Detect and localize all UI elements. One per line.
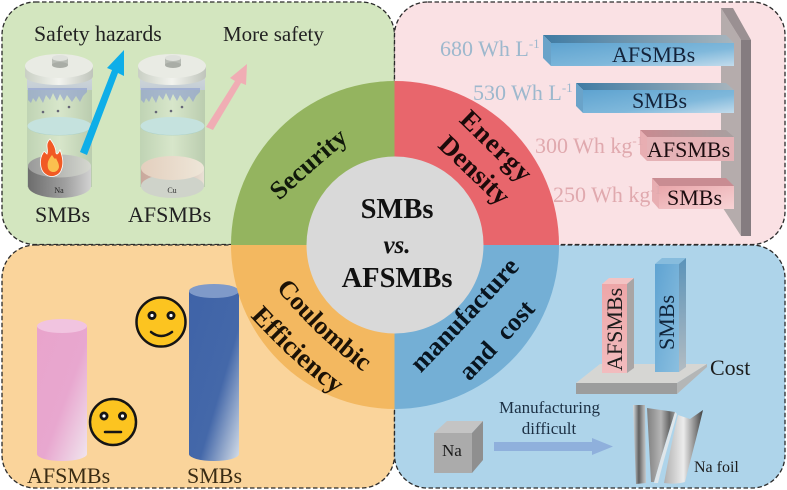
value: 680 Wh per litre: 680 Wh L	[440, 36, 529, 61]
bar label: SMBs gravimetric: SMBs	[667, 185, 722, 210]
pillar label: AFSMBs: AFSMBs	[602, 288, 627, 371]
ring label: energy: Energy	[458, 108, 530, 182]
label: SMBs battery: SMBs	[35, 202, 90, 227]
ring label: density: Density	[437, 134, 508, 204]
chart: energy density wall and bars	[543, 8, 751, 236]
chart: blue SMBs cylinder	[189, 284, 239, 461]
label: Na foil: Na foil	[694, 459, 739, 476]
chart: pink AFSMBs cylinder	[37, 319, 87, 461]
icon: smiling face	[136, 298, 186, 346]
chart: cost pillars on base	[576, 258, 707, 394]
bar label: AFSMBs gravimetric: AFSMBs	[647, 137, 730, 162]
label: AFSMBs cylinder: AFSMBs	[27, 463, 110, 488]
icon: SMB battery with sodium anode and flame	[25, 54, 93, 198]
center title: vs.	[383, 232, 411, 259]
label: SMBs cylinder: SMBs	[187, 463, 242, 488]
center title: AFSMBs	[342, 263, 452, 294]
heading: safety hazards: Safety hazards	[34, 22, 162, 46]
bar label: AFSMBs volumetric: AFSMBs	[612, 42, 695, 67]
icon: SMB battery with sodium anode and flame: Na	[54, 186, 64, 195]
value: 300 Wh per kg: -1	[632, 133, 643, 148]
arrow: more safety	[206, 64, 247, 130]
value: 530 Wh per litre: -1	[562, 80, 573, 95]
icon: sodium cube	[434, 421, 483, 473]
ring label: and cost: and cost	[462, 302, 536, 380]
pillar label: SMBs: SMBs	[654, 295, 679, 350]
ring label: efficiency: Efficiency	[250, 304, 342, 394]
value: 680 Wh per litre: -1	[529, 36, 540, 51]
panel: security background	[2, 2, 394, 244]
ring label: coulombic: Coulombic	[280, 281, 370, 371]
arrow: safety hazards	[80, 50, 124, 155]
value: 530 Wh per litre: 530 Wh L	[473, 80, 562, 105]
value: 300 Wh per kg: 300 Wh kg	[535, 133, 632, 158]
panel: coulombic efficiency background	[2, 245, 394, 488]
arrow: manufacturing	[494, 438, 613, 455]
panel: energy density background	[394, 2, 785, 244]
label: manufacturing difficult: difficult	[522, 419, 577, 438]
icon: AFSMB battery with copper collector: Cu	[167, 186, 177, 195]
ring label: security: Security	[270, 131, 346, 200]
label: manufacturing difficult: Manufacturing	[499, 398, 600, 417]
panel: manufacture and cost background	[394, 245, 785, 488]
bar label: SMBs volumetric: SMBs	[632, 88, 687, 113]
icon: sodium cube: Na	[442, 441, 462, 460]
center title: SMBs	[361, 194, 433, 225]
value: 250 Wh per kg: 250 Wh kg	[553, 182, 650, 207]
icon: flame	[40, 139, 63, 176]
heading: more safety: More safety	[223, 22, 324, 46]
value: 250 Wh per kg: -1	[650, 182, 661, 197]
ring: central comparison wheel	[231, 81, 559, 409]
label: AFSMBs battery: AFSMBs	[128, 202, 211, 227]
label: cost: Cost	[710, 355, 750, 380]
icon: AFSMB battery with copper collector	[138, 54, 206, 198]
icon: neutral face	[90, 399, 136, 445]
ring label: manufacture: manufacture	[412, 261, 519, 373]
icon: sodium foil	[633, 405, 703, 484]
